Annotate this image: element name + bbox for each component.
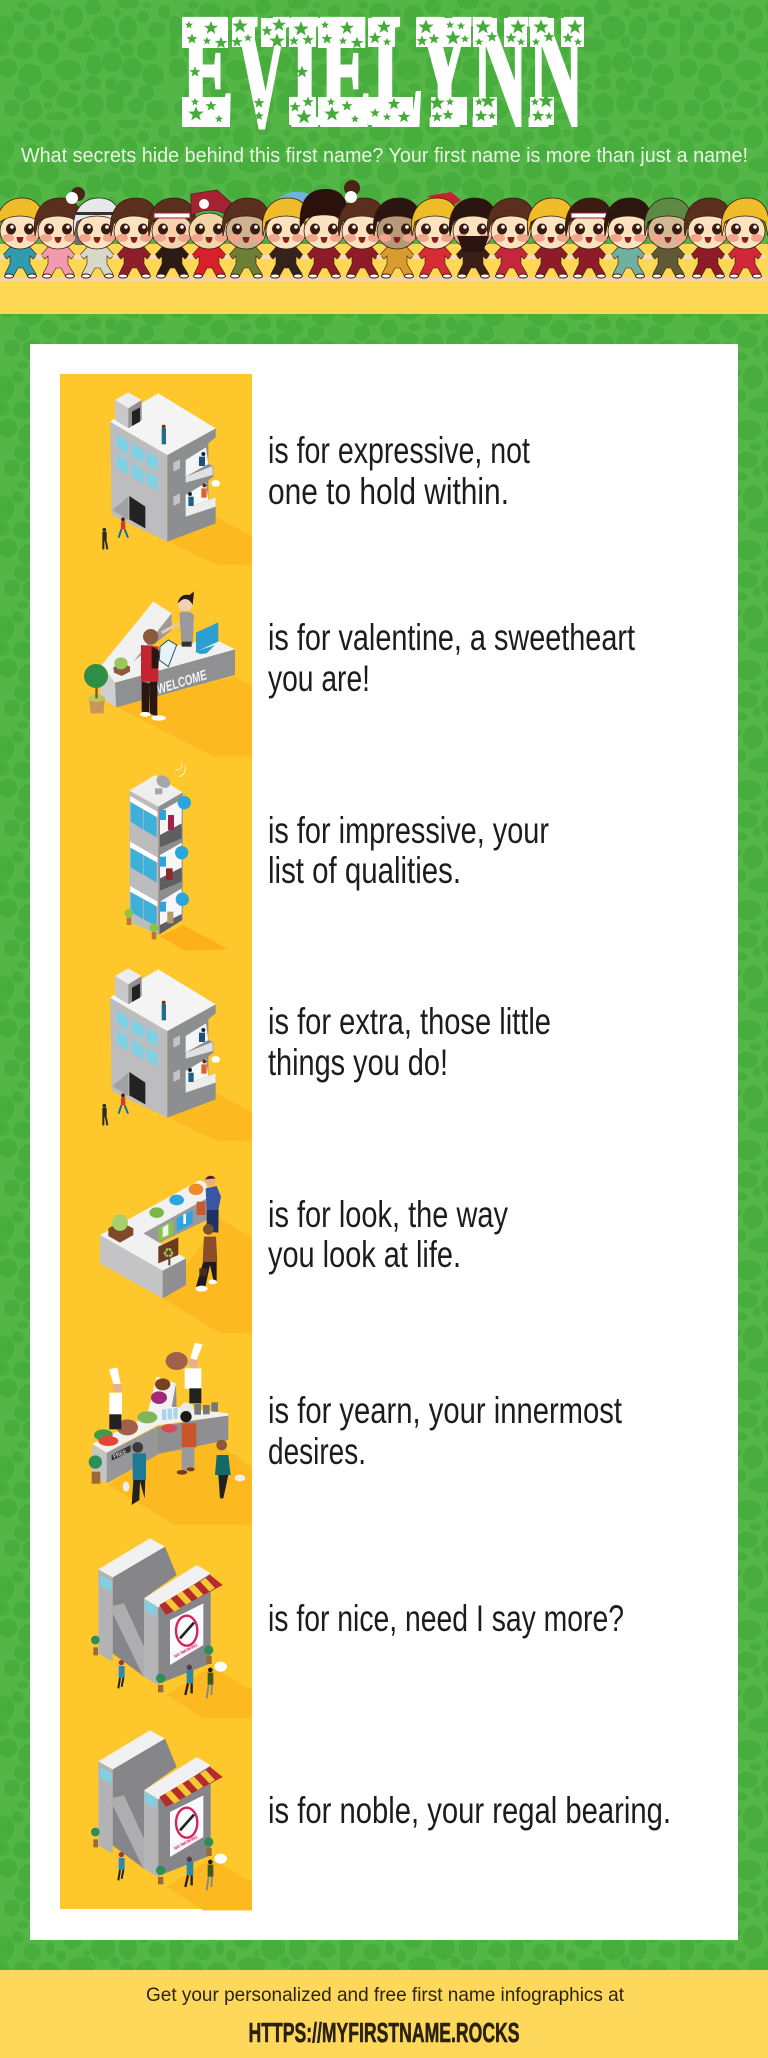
row of cartoon characters bbox=[0, 180, 768, 278]
illustration: recycling counter (L): ♻ bbox=[163, 1246, 175, 1261]
row 6 text: is for yearn, your innermost bbox=[268, 1390, 623, 1431]
character 12 bbox=[411, 192, 461, 278]
row 4 text bbox=[268, 1001, 551, 1083]
character 16 bbox=[565, 198, 613, 278]
footer url: HTTPS://MYFIRSTNAME.ROCKS bbox=[248, 2017, 520, 2048]
character 7 bbox=[222, 198, 270, 278]
row 4 text: things you do! bbox=[268, 1042, 448, 1083]
illustration: office building (E, repeat) bbox=[102, 968, 252, 1141]
row 2 text bbox=[268, 617, 636, 699]
row 6 text bbox=[268, 1390, 623, 1472]
illustration: N building (N): NO SMOKING bbox=[173, 1642, 199, 1659]
character 5 bbox=[148, 198, 196, 278]
row 1 text bbox=[268, 430, 531, 512]
white content panel bbox=[30, 344, 738, 1940]
character 18 bbox=[644, 198, 692, 278]
illustration: welcome desk (V) bbox=[84, 592, 252, 757]
title: EVIELYNN bbox=[182, 0, 584, 161]
character 15 bbox=[527, 198, 575, 278]
illustration: tall tower (I) bbox=[125, 763, 228, 951]
row 2 text: is for valentine, a sweetheart bbox=[268, 617, 636, 658]
yellow illustration column bbox=[60, 374, 252, 1909]
row 5 text: you look at life. bbox=[268, 1234, 461, 1275]
character 1 bbox=[0, 198, 44, 278]
character 13 bbox=[449, 198, 497, 278]
character 11 bbox=[373, 198, 421, 278]
row 3 text: list of qualities. bbox=[268, 850, 461, 891]
character 9 bbox=[300, 189, 348, 278]
row 1 text: is for expressive, not bbox=[268, 430, 531, 471]
character 8 bbox=[262, 192, 314, 278]
character 6 bbox=[188, 190, 235, 278]
character 14 bbox=[487, 198, 535, 278]
row 5 text: is for look, the way bbox=[268, 1194, 508, 1235]
illustration: N building (N) bbox=[91, 1538, 252, 1718]
illustration: office building (E) bbox=[102, 392, 252, 565]
row 5 text bbox=[268, 1194, 508, 1275]
footer bbox=[0, 1970, 768, 2058]
illustration: recycling counter (L) bbox=[100, 1175, 252, 1333]
row 4 text: is for extra, those little bbox=[268, 1001, 551, 1042]
row 7 text: is for nice, need I say more? bbox=[268, 1598, 624, 1639]
character 2 bbox=[34, 187, 85, 278]
character 19 bbox=[684, 198, 732, 278]
illustration: N building (N, repeat) bbox=[91, 1730, 252, 1910]
character 4 bbox=[110, 198, 158, 278]
character 3 bbox=[73, 198, 121, 278]
row 6 text: desires. bbox=[268, 1431, 366, 1472]
illustration: buffet (Y) bbox=[89, 1343, 252, 1525]
footer text: Get your personalized and free first name infographics at bbox=[146, 1984, 625, 2006]
character 20 bbox=[721, 198, 768, 278]
illustration: welcome desk (V): WELCOME bbox=[155, 666, 209, 697]
row 3 text bbox=[268, 810, 549, 891]
character 17 bbox=[604, 198, 652, 278]
row 1 text: one to hold within. bbox=[268, 471, 509, 512]
row 8 text: is for noble, your regal bearing. bbox=[268, 1790, 671, 1831]
row 3 text: is for impressive, your bbox=[268, 810, 549, 851]
subtitle: What secrets hide behind this first name? Your first name is more than just a name! bbox=[21, 145, 748, 167]
illustration: buffet (Y): FREE bbox=[113, 1449, 128, 1460]
row 2 text: you are! bbox=[268, 658, 370, 699]
yellow band behind characters bbox=[0, 244, 768, 314]
character 10 bbox=[338, 180, 386, 278]
